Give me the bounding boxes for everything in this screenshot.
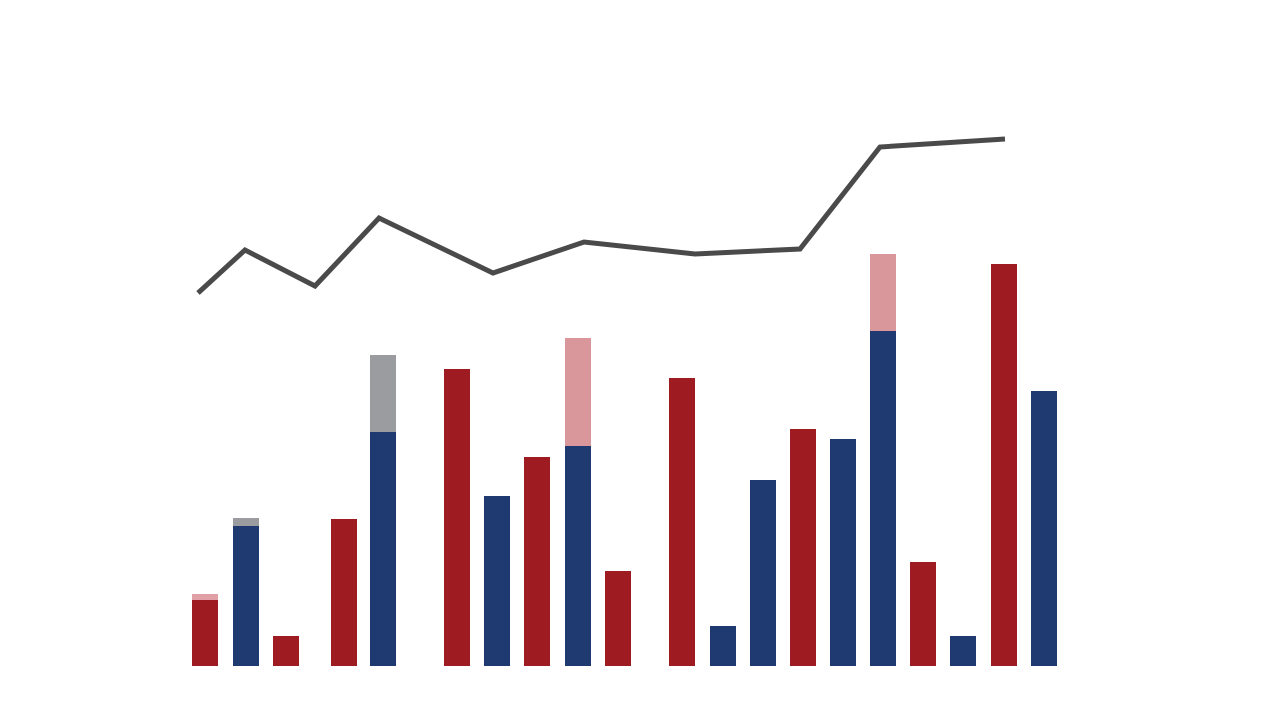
line series (198, 139, 1005, 293)
bar group (192, 254, 1057, 666)
